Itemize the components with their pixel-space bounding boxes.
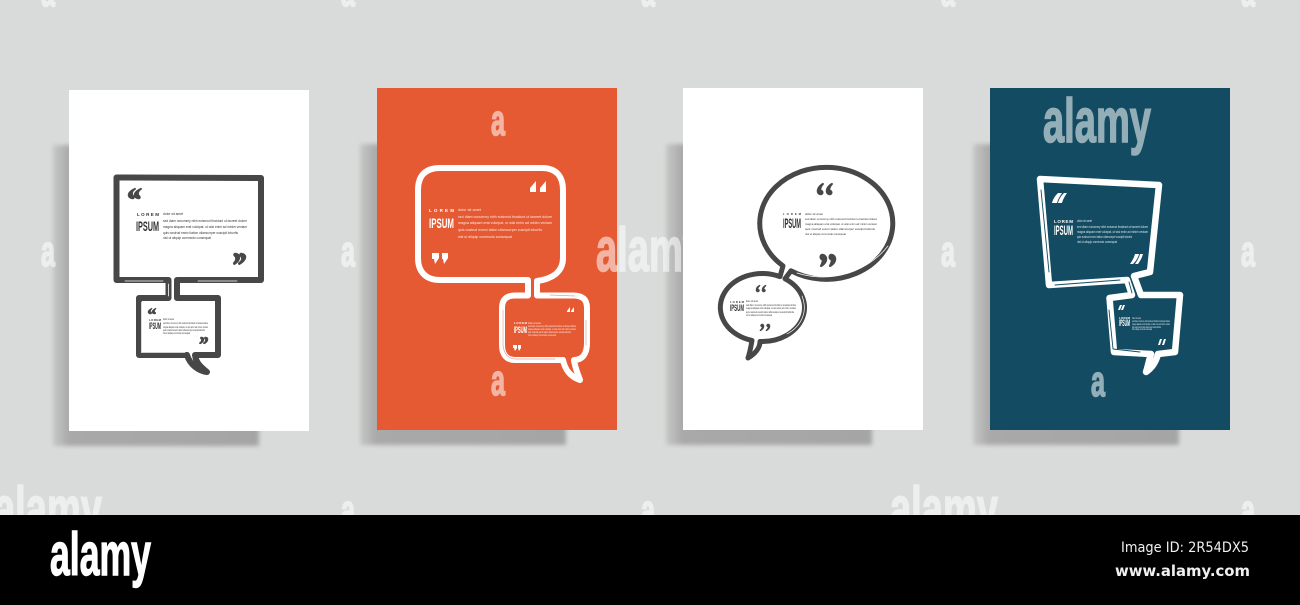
- panel shadows: [53, 144, 1179, 446]
- bubble text: large: [1054, 218, 1149, 244]
- bubble text: large: LOREM: [1054, 219, 1073, 224]
- watermarks: a: [1091, 357, 1105, 406]
- bubble outlines: [1040, 179, 1180, 372]
- panel: white poster with oval bubbles: [683, 88, 923, 430]
- bubble text: large: quis nostrud exerci tation ullamcorper suscipit lobortis: [1077, 234, 1132, 239]
- website: www.alamy.com: [1115, 562, 1250, 580]
- bubble text: small: quis nostrud exerci tation ullamcorper suscipit lobortis: [163, 328, 205, 332]
- bubble text: large: IPSUM: [1054, 222, 1073, 238]
- bubble text: large: [783, 212, 878, 236]
- bubble text: large: [136, 211, 248, 240]
- bubble outlines: [116, 178, 261, 372]
- bubble text: small: LOREM: [730, 300, 745, 304]
- bubble text: large: magna aliquam erat volutpat. ut wisi enim ad minim veniam: [163, 224, 248, 229]
- bubble text: small: nisl ut aliquip commodo consequat: [528, 333, 556, 337]
- bubble text: small: quis nostrud exerci tation ullamcorper suscipit lobortis: [1132, 325, 1161, 329]
- bubble text: large: nisl ut aliquip commodo consequat: [1077, 239, 1118, 244]
- bubble outlines: [418, 168, 587, 380]
- bubble text: large: quis nostrud exerci tation ullamcorper suscipit lobortis: [458, 227, 542, 232]
- bubble text: small: IPSUM: [730, 303, 744, 313]
- watermarks: a: [641, 486, 655, 535]
- bubble text: large: magna aliquam erat volutpat. ut wisi enim ad minim veniam: [805, 222, 877, 226]
- bubble text: large: magna aliquam erat volutpat. ut wisi enim ad minim veniam: [1077, 229, 1148, 234]
- bubble text: small: magna aliquam erat volutpat. ut wisi enim ad minim veniam: [528, 327, 576, 331]
- bubble text: large: [429, 207, 553, 239]
- bubble text: large: IPSUM: [783, 215, 801, 231]
- bubble text: small: dolor sit amet: [163, 317, 174, 321]
- bubble text: large: sed diam nonummy nibh euismod tincidunt ut laoreet dolore: [163, 218, 248, 223]
- bubble text: small: IPSUM: [514, 325, 527, 335]
- bubble text: large: nisl ut aliquip commodo consequat: [163, 235, 212, 240]
- footer logo: alamy: [50, 521, 151, 588]
- bubble text: large: LOREM: [783, 212, 802, 216]
- bubble text: large: quis nostrud exerci tation ullamcorper suscipit lobortis: [805, 227, 876, 231]
- bubble text: large: dolor sit amet: [458, 207, 482, 212]
- image id: Image ID: 2R54DX5: [1121, 540, 1249, 556]
- quote marks: [128, 188, 246, 344]
- watermarks: a: [941, 227, 955, 276]
- bubble text: small: [730, 299, 796, 317]
- bubble text: large: sed diam nonummy nibh euismod tincidunt ut laoreet dolore: [1077, 224, 1149, 229]
- bubble text: small: IPSUM: [1119, 318, 1130, 328]
- bubble text: small: [149, 317, 208, 335]
- bubble text: small: [1119, 316, 1170, 331]
- bubble text: small: nisl ut aliquip commodo consequat: [746, 313, 772, 317]
- bubble text: large: LOREM: [137, 212, 159, 217]
- bubble outlines: [720, 167, 893, 358]
- bubble text: large: nisl ut aliquip commodo consequat: [458, 234, 513, 239]
- bubble text: small: quis nostrud exerci tation ullamcorper suscipit lobortis: [528, 330, 571, 334]
- bubble text: large: LOREM: [429, 208, 454, 213]
- bubble text: small: sed diam nonummy nibh euismod tincidunt ut laoreet dolore: [528, 324, 576, 328]
- panel: teal poster with skewed bubbles: [990, 88, 1230, 430]
- bubble text: large: sed diam nonummy nibh euismod tincidunt ut laoreet dolore: [805, 217, 878, 221]
- watermarks: a: [491, 96, 505, 145]
- bubble text: small: dolor sit amet: [1132, 316, 1141, 320]
- bubble text: small: quis nostrud exerci tation ullamcorper suscipit lobortis: [746, 310, 795, 314]
- watermarks: alamy: [596, 216, 704, 285]
- panel: white poster with rectangular bubbles: [69, 90, 309, 431]
- watermarks: a: [41, 227, 55, 276]
- watermarks: alamy: [1043, 87, 1151, 156]
- footer bar: [0, 515, 1300, 605]
- bubble text: large: dolor sit amet: [805, 212, 823, 216]
- bubble text: small: nisl ut aliquip commodo consequat: [1132, 327, 1152, 331]
- bubble text: small: sed diam nonummy nibh euismod tincidunt ut laoreet dolore: [746, 303, 796, 307]
- bubble text: small: magna aliquam erat volutpat. ut wisi enim ad minim veniam: [746, 306, 796, 310]
- bubble text: small: dolor sit amet: [746, 299, 758, 303]
- watermarks: alamy: [890, 475, 998, 544]
- bubble text: small: nisl ut aliquip commodo consequat: [163, 331, 190, 335]
- watermarks: a: [341, 227, 355, 276]
- bubble text: large: IPSUM: [136, 218, 159, 234]
- bubble text: large: dolor sit amet: [163, 211, 184, 216]
- bubble text: small: LOREM: [1119, 316, 1131, 320]
- quote marks: [432, 181, 574, 351]
- watermarks: a: [341, 486, 355, 535]
- bubble text: large: sed diam nonummy nibh euismod tincidunt ut laoreet dolore: [458, 214, 553, 219]
- watermarks: a: [491, 356, 505, 405]
- bubble text: small: IPSUM: [149, 321, 161, 331]
- bubble text: large: quis nostrud exerci tation ullamcorper suscipit lobortis: [163, 230, 238, 235]
- watermarks: a: [1241, 486, 1255, 535]
- bubble text: large: nisl ut aliquip commodo consequat: [805, 232, 846, 236]
- bubble text: large: magna aliquam erat volutpat. ut wisi enim ad minim veniam: [458, 220, 553, 225]
- bubble text: large: IPSUM: [429, 215, 454, 231]
- bubble text: small: magna aliquam erat volutpat. ut wisi enim ad minim veniam: [1132, 322, 1170, 326]
- bubble text: small: LOREM: [149, 318, 162, 322]
- bubble text: small: dolor sit amet: [528, 321, 541, 325]
- bubble text: small: sed diam nonummy nibh euismod tincidunt ut laoreet dolore: [163, 321, 208, 325]
- bubble text: large: dolor sit amet: [1077, 218, 1093, 223]
- watermarks: a: [1241, 227, 1255, 276]
- bubble text: small: LOREM: [514, 321, 528, 325]
- bubble text: small: magna aliquam erat volutpat. ut wisi enim ad minim veniam: [163, 325, 208, 329]
- panel: orange poster with rounded bubbles: [377, 88, 617, 430]
- quote marks: [756, 183, 836, 331]
- bubble text: small: [514, 321, 576, 337]
- quote marks: [1052, 193, 1166, 345]
- bubble text: small: sed diam nonummy nibh euismod tincidunt ut laoreet dolore: [1132, 319, 1170, 323]
